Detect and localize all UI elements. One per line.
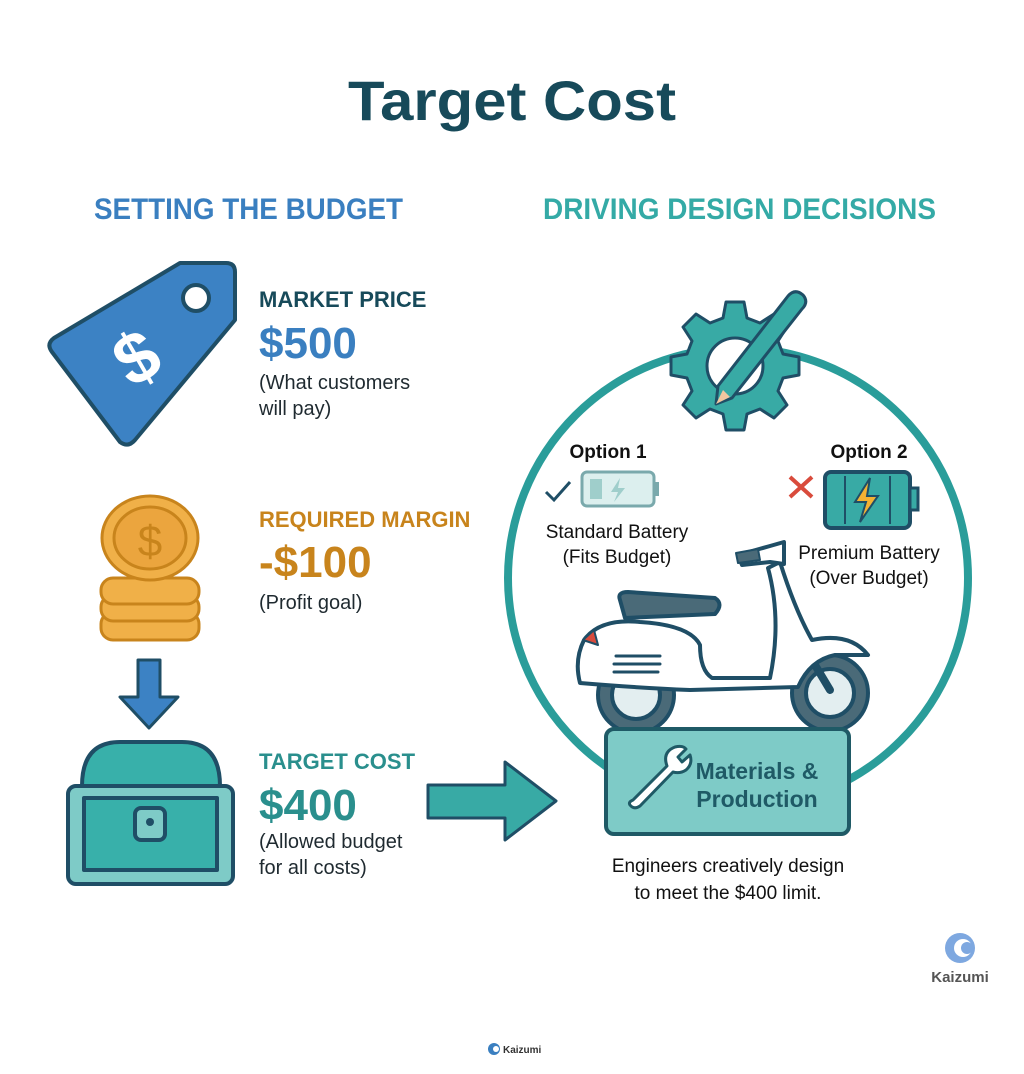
option 1: Option 1 (569, 442, 647, 463)
heading: setting the budget: SETTING THE BUDGET (94, 193, 403, 226)
icon: gear with pencil (671, 292, 806, 430)
text: target cost (259, 749, 416, 879)
text: market price: will pay) (258, 398, 331, 420)
option 1: (Fits Budget) (563, 547, 671, 568)
option 1 (546, 442, 689, 568)
text: target cost: for all costs) (259, 857, 367, 879)
box: materials & production: Materials & (696, 758, 818, 784)
arrow: down (120, 660, 178, 728)
text: target cost: TARGET COST (259, 749, 416, 774)
arrow: right (428, 762, 556, 840)
icon: treasure chest (68, 742, 233, 884)
text: market price: $500 (259, 319, 357, 368)
footer logo (488, 1043, 542, 1056)
option 2 (790, 442, 940, 589)
footer logo: Kaizumi (503, 1045, 542, 1056)
box: materials & production (606, 729, 849, 834)
design circle (508, 348, 968, 808)
heading: driving design decisions: DRIVING DESIGN DECISIONS (543, 193, 936, 226)
caption: to meet the $400 limit. (635, 883, 821, 904)
icon: scooter (578, 542, 868, 733)
text: required margin: (Profit goal) (259, 592, 362, 614)
title: Target Cost (348, 69, 676, 132)
text: market price: MARKET PRICE (259, 287, 426, 312)
text: target cost: $400 (259, 781, 357, 830)
logo: Kaizumi (931, 933, 989, 986)
icon: wrench (629, 746, 691, 808)
logo: Kaizumi: Kaizumi (931, 969, 989, 986)
icon: price tag (49, 263, 235, 445)
option 2: Option 2 (830, 442, 908, 463)
text: market price (258, 287, 426, 420)
box: materials & production: Production (696, 786, 818, 812)
option 2: (Over Budget) (809, 568, 929, 589)
option 2: Premium Battery (798, 543, 940, 564)
text: required margin: REQUIRED MARGIN (259, 507, 470, 532)
icon: coins: $ (138, 517, 162, 566)
option 1: Standard Battery (546, 522, 689, 543)
caption (612, 856, 844, 904)
text: required margin: -$100 (259, 538, 372, 587)
text: required margin (259, 507, 470, 614)
icon: coins (101, 496, 199, 640)
text: market price: (What customers (259, 372, 410, 394)
icon: price tag: $ (100, 314, 174, 403)
text: target cost: (Allowed budget (259, 831, 403, 853)
caption: Engineers creatively design (612, 856, 844, 877)
